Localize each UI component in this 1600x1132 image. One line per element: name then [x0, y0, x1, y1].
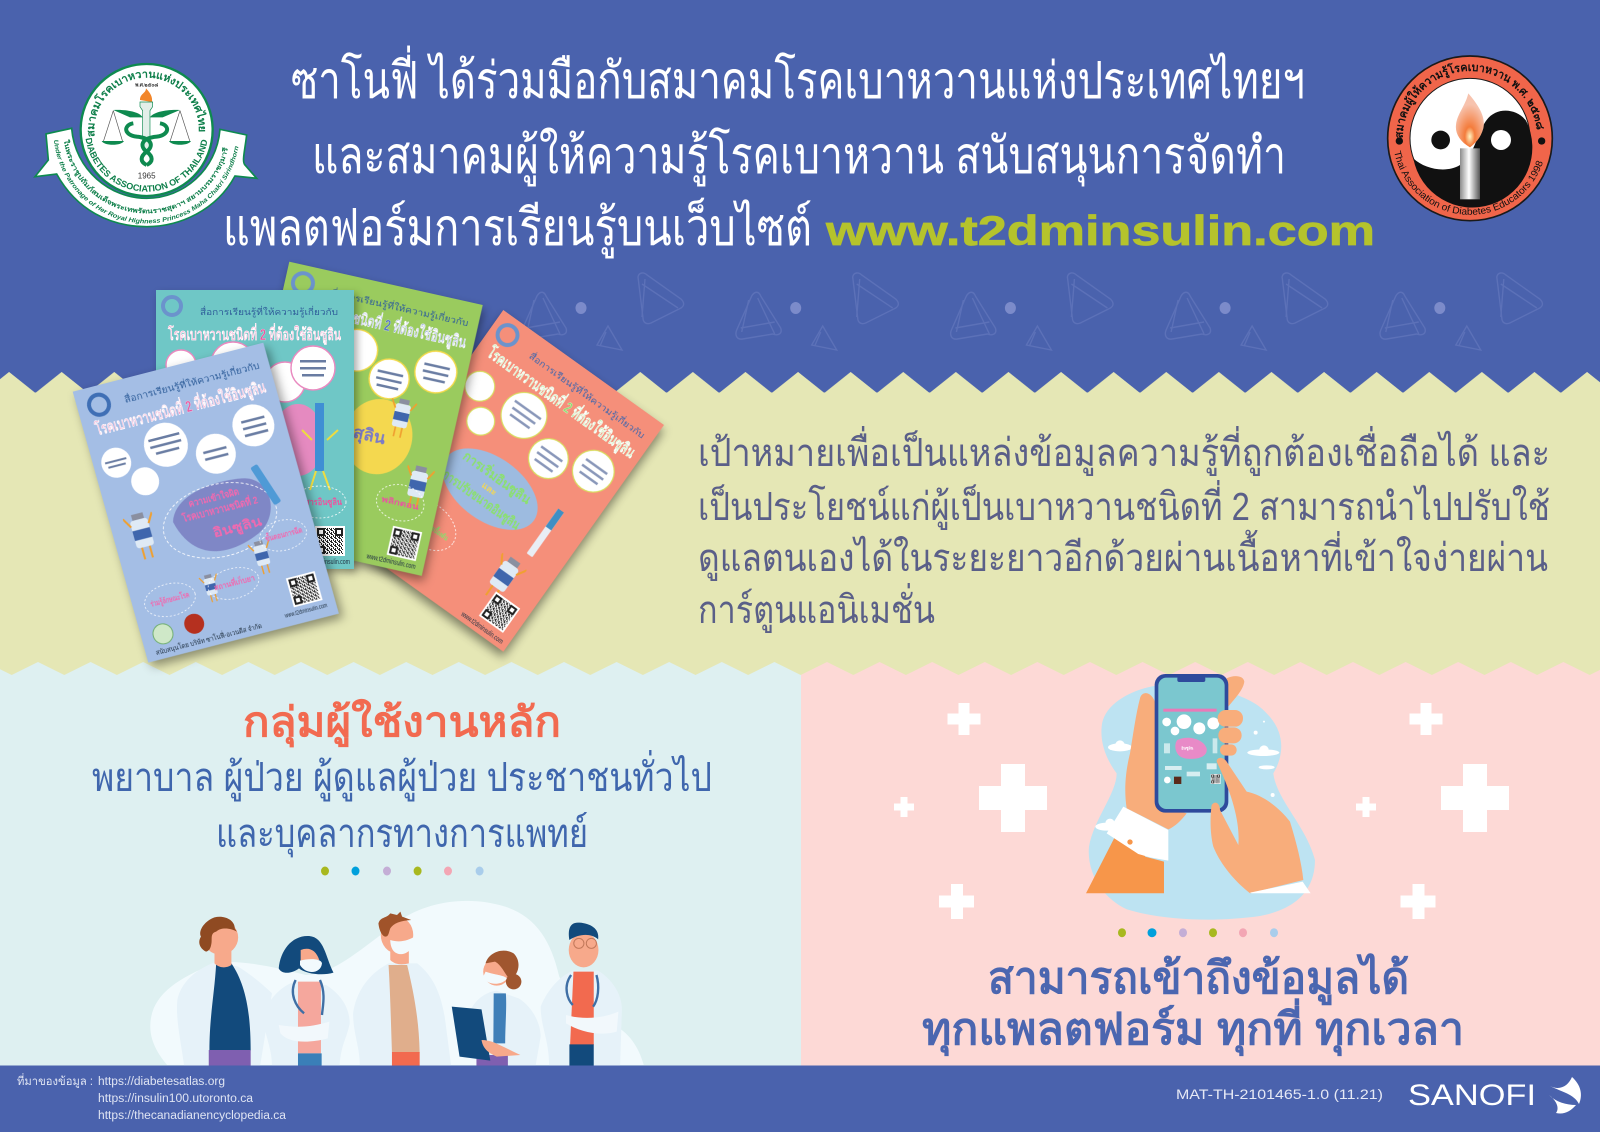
sources — [17, 1073, 287, 1122]
poster: blue: โรคเบาหวานชนิดที่ 2 ที่ต้องใช้อินซูลิน — [92, 375, 268, 441]
poster: salmon: สื่อการเรียนรู้ที่ให้ความรู้เกี่ยวกับ — [527, 349, 648, 441]
sources: https://diabetesatlas.org — [98, 1076, 225, 1088]
poster: green: www.t2dminsulin.com — [365, 553, 416, 571]
logo: Diabetes Association of Thailand: สมาคมโรคเบาหวานแห่งประเทศไทย — [88, 72, 206, 137]
poster: salmon — [343, 310, 664, 652]
material code: MAT-TH-2101465-1.0 (11.21) — [1176, 1086, 1383, 1102]
doctor 3 — [353, 912, 451, 1066]
poster: green — [228, 262, 483, 576]
thumb behind phone — [1227, 676, 1244, 707]
candle — [1460, 148, 1480, 199]
left hand — [1125, 693, 1187, 829]
doctor 5 — [541, 923, 622, 1066]
beige lower zigzag — [0, 662, 1600, 675]
fingers — [1218, 710, 1243, 756]
poster: blue: สนับสนุนโดย บริษัท ซาโนฟี่-อเวนตีส จำกัด — [155, 621, 263, 657]
logo: Diabetes Association of Thailand: Under the Patronage of Her Royal Highness Princess Maha Chakri Sirindhorn — [54, 140, 238, 224]
illustration: hands holding phone — [1086, 674, 1315, 920]
heading: main users: กลุ่มผู้ใช้งานหลัก — [243, 698, 561, 748]
poster: blue: ขั้นตอนการฉีด — [264, 524, 303, 544]
cuff — [1107, 807, 1168, 861]
phone screen — [1162, 714, 1219, 783]
logo: Diabetes Association of Thailand: พ.ศ.๒๕๐๘ — [135, 83, 158, 89]
illustration: medical team — [150, 901, 644, 1066]
goal text block: การ์ตูนแอนิเมชั่น — [698, 583, 935, 633]
seal — [81, 64, 213, 196]
ribbon — [35, 128, 257, 227]
poster: salmon: www.t2dminsulin.com — [459, 611, 504, 646]
poster: teal: โรคเบาหวานชนิดที่ 2 ที่ต้องใช้อินซูลิน — [167, 323, 341, 346]
poster: blue — [73, 343, 339, 663]
sources: ที่มาของข้อมูล : — [17, 1073, 93, 1088]
sanofi logo: SANOFI — [1408, 1079, 1536, 1112]
doctor 2 — [264, 936, 350, 1066]
poster: green: โรคเบาหวานชนิดที่ 2 ที่ต้องใช้อินซูลิน — [289, 292, 469, 354]
users text: พยาบาล ผู้ป่วย ผู้ดูแลผู้ป่วย ประชาชนทั่วไป — [92, 750, 712, 801]
title: แพลตฟอร์มการเรียนรู้บนเว็บไซต์ — [223, 198, 812, 259]
pen character — [315, 403, 324, 471]
logo: Thai Association of Diabetes Educators: Thai Association of Diabetes Educators 1998 — [1394, 150, 1542, 215]
poster: teal: สื่อการเรียนรู้ที่ให้ความรู้เกี่ยวกับ — [200, 305, 338, 318]
sources: https://thecanadianencyclopedia.ca — [98, 1110, 287, 1122]
sleeve — [1086, 837, 1164, 893]
poster: green: สื่อการเรียนรู้ที่ให้ความรู้เกี่ยวกับ — [330, 286, 470, 329]
poster: salmon: การเริ่มอินซูลิน — [460, 447, 535, 508]
poster: blue: อินซูลิน — [211, 513, 264, 541]
right cuff — [1250, 882, 1311, 893]
heading: access anywhere: ทุกแพลตฟอร์ม ทุกที่ ทุกเวลา — [922, 998, 1464, 1057]
users text: และบุคลากรทางการแพทย์ — [216, 811, 588, 858]
heading: access anywhere — [922, 952, 1464, 1057]
poster: blue: www.t2dminsulin.com — [284, 603, 328, 620]
poster: blue: ความเข้าใจผิด — [187, 486, 240, 509]
heading: access anywhere: สามารถเข้าถึงข้อมูลได้ — [988, 952, 1409, 1005]
logo: Diabetes Association of Thailand: 1965 — [138, 172, 156, 181]
poster: salmon: โรคเบาหวานชนิดที่ 2 ที่ต้องใช้อินซูลิน — [482, 341, 640, 463]
poster: salmon: การปรับขนาดอินซูลิน — [439, 467, 523, 533]
users text — [92, 750, 712, 858]
sanofi logo — [1408, 1077, 1581, 1114]
background: top blue band — [0, 0, 1600, 400]
title: และสมาคมผู้ให้ความรู้โรคเบาหวาน สนับสนุนการจัดทำ — [312, 127, 1286, 187]
panel: users (teal) — [0, 662, 801, 1066]
yin yang — [1413, 111, 1532, 208]
dots row right — [1118, 928, 1278, 937]
crosses — [894, 703, 1509, 919]
logo: Thai Association of Diabetes Educators — [1386, 55, 1554, 222]
poster: teal — [156, 290, 354, 569]
torch and caduceus — [140, 88, 152, 102]
poster: blue: สถานที่เก็บยา — [212, 571, 256, 592]
sources: https://insulin100.utoronto.ca — [98, 1093, 254, 1105]
logo: Diabetes Association of Thailand — [33, 62, 258, 228]
footer bar — [0, 1066, 1600, 1132]
poster: blue: ร่วมรู้ลักษณะโรค — [149, 589, 191, 610]
poster: salmon: และ — [480, 480, 499, 497]
poster: salmon: การดูแลตนเองเบื้องต้น — [404, 505, 451, 543]
logo: Thai Association of Diabetes Educators: สมาคมผู้ให้ความรู้โรคเบาหวาน พ.ศ. ๒๕๓๘ — [1396, 62, 1544, 138]
doctor 1 — [177, 917, 272, 1066]
blue blob — [1089, 685, 1315, 920]
website url: www.t2dminsulin.com — [825, 207, 1375, 254]
goal text block — [698, 426, 1550, 633]
doctor 4 with clipboard — [452, 951, 541, 1066]
background pattern — [521, 273, 1542, 350]
dots row left — [321, 866, 484, 876]
poster: teal: ซีสารอินซูลิน — [300, 497, 343, 508]
poster: blue: สื่อการเรียนรู้ที่ให้ความรู้เกี่ยวกับ — [123, 359, 261, 406]
title: ซาโนฟี่ ได้ร่วมมือกับสมาคมโรคเบาหวานแห่งประเทศไทยฯ — [291, 46, 1305, 109]
panel: access (pink) — [801, 662, 1600, 1066]
poster: teal: www.t2dminsulin.com — [299, 559, 350, 566]
right hand — [1211, 758, 1303, 893]
panel: beige band with zigzag edges — [0, 372, 1600, 662]
logo: Diabetes Association of Thailand: DIABETES ASSOCIATION OF THAILAND — [86, 138, 207, 192]
poster: green: พลิกตอน — [381, 495, 420, 512]
logo: Diabetes Association of Thailand: ในพระราชูปถัมภ์สมเด็จพระเทพรัตนราชสุดาฯ สยามบรมราชกุมารี — [64, 139, 228, 214]
flame — [1456, 93, 1484, 147]
poster: green: สุลิน — [351, 422, 388, 449]
title — [223, 46, 1375, 259]
phone — [1155, 674, 1228, 813]
poster: blue: โรคเบาหวานชนิดที่ 2 — [180, 492, 260, 526]
illustration: hands holding phone: อินซูลิน — [1181, 745, 1194, 751]
